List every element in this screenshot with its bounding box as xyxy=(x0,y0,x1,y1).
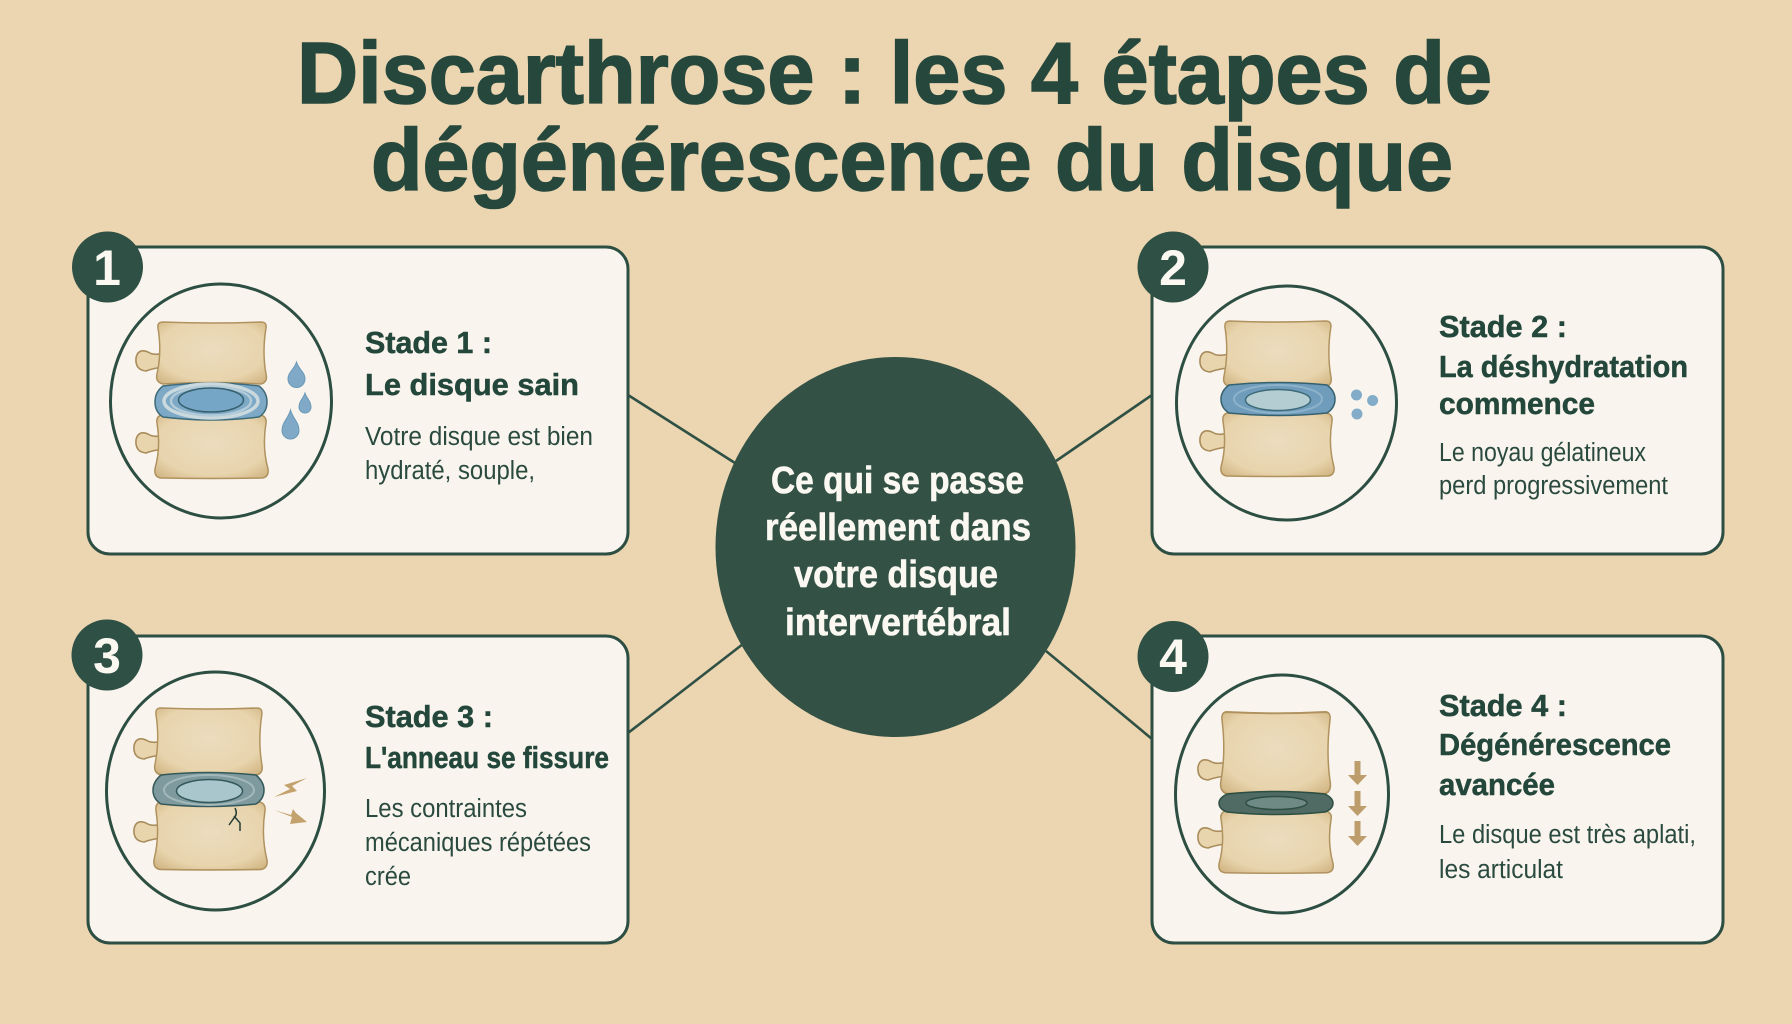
heading stage 4: Stade 4 : xyxy=(1439,688,1567,723)
body stage 2: perd progressivement xyxy=(1439,472,1668,500)
panel: stage 4 xyxy=(1138,621,1723,943)
badge 1: 1 xyxy=(93,240,121,296)
heading stage 3 xyxy=(365,699,609,775)
icon: flattened disc xyxy=(1176,675,1388,913)
title xyxy=(297,25,1492,209)
panel: stage 1 xyxy=(72,232,628,554)
icon: fissured disc xyxy=(106,672,324,910)
body stage 1: Votre disque est bien xyxy=(365,423,593,451)
badge 3 xyxy=(72,620,142,690)
badge 1 xyxy=(72,232,143,302)
panel: stage 3 xyxy=(72,620,628,943)
heading stage 4: avancée xyxy=(1439,767,1555,802)
icon: compression arrows xyxy=(1348,761,1367,846)
icon: dehydrating disc xyxy=(1176,286,1396,520)
body stage 3 xyxy=(365,795,591,891)
title: dégénérescence du disque xyxy=(371,112,1453,209)
icon: droplets xyxy=(1351,390,1378,420)
body stage 3: Les contraintes xyxy=(365,795,527,823)
icon: water drops xyxy=(282,362,311,439)
body stage 2: Le noyau gélatineux xyxy=(1439,439,1646,467)
central circle xyxy=(716,357,1076,737)
body stage 4 xyxy=(1439,821,1696,884)
central circle: Ce qui se passe xyxy=(771,460,1024,502)
body stage 3: mécaniques répétées xyxy=(365,829,591,857)
badge 4: 4 xyxy=(1159,629,1187,685)
title: Discarthrose : les 4 étapes de xyxy=(297,25,1492,122)
heading stage 1: Stade 1 : xyxy=(365,325,492,360)
heading stage 2 xyxy=(1439,309,1688,421)
heading stage 4 xyxy=(1439,688,1671,802)
heading stage 2: La déshydratation xyxy=(1439,349,1688,384)
body stage 4: les articulat xyxy=(1439,856,1563,884)
heading stage 2: commence xyxy=(1439,386,1595,421)
heading stage 4: Dégénérescence xyxy=(1439,727,1671,762)
central circle: votre disque xyxy=(794,554,998,596)
badge 2 xyxy=(1138,232,1208,302)
badge 4 xyxy=(1138,621,1208,692)
icon: stress bolts xyxy=(274,778,307,824)
badge 2: 2 xyxy=(1159,240,1187,296)
body stage 3: crée xyxy=(365,863,411,891)
badge 3: 3 xyxy=(93,628,121,684)
panel: stage 2 xyxy=(1138,232,1723,554)
heading stage 1: Le disque sain xyxy=(365,367,579,402)
body stage 4: Le disque est très aplati, xyxy=(1439,821,1696,849)
central circle: réellement dans xyxy=(765,507,1031,549)
heading stage 3: L'anneau se fissure xyxy=(365,740,609,775)
central circle: intervertébral xyxy=(785,602,1011,644)
connector lines xyxy=(628,395,1152,739)
heading stage 3: Stade 3 : xyxy=(365,699,493,734)
icon: healthy disc xyxy=(110,284,332,518)
body stage 1 xyxy=(365,423,593,485)
body stage 2 xyxy=(1439,439,1668,500)
heading stage 2: Stade 2 : xyxy=(1439,309,1567,344)
heading stage 1 xyxy=(365,325,579,402)
icon: crack xyxy=(229,808,240,831)
body stage 1: hydraté, souple, xyxy=(365,457,535,485)
